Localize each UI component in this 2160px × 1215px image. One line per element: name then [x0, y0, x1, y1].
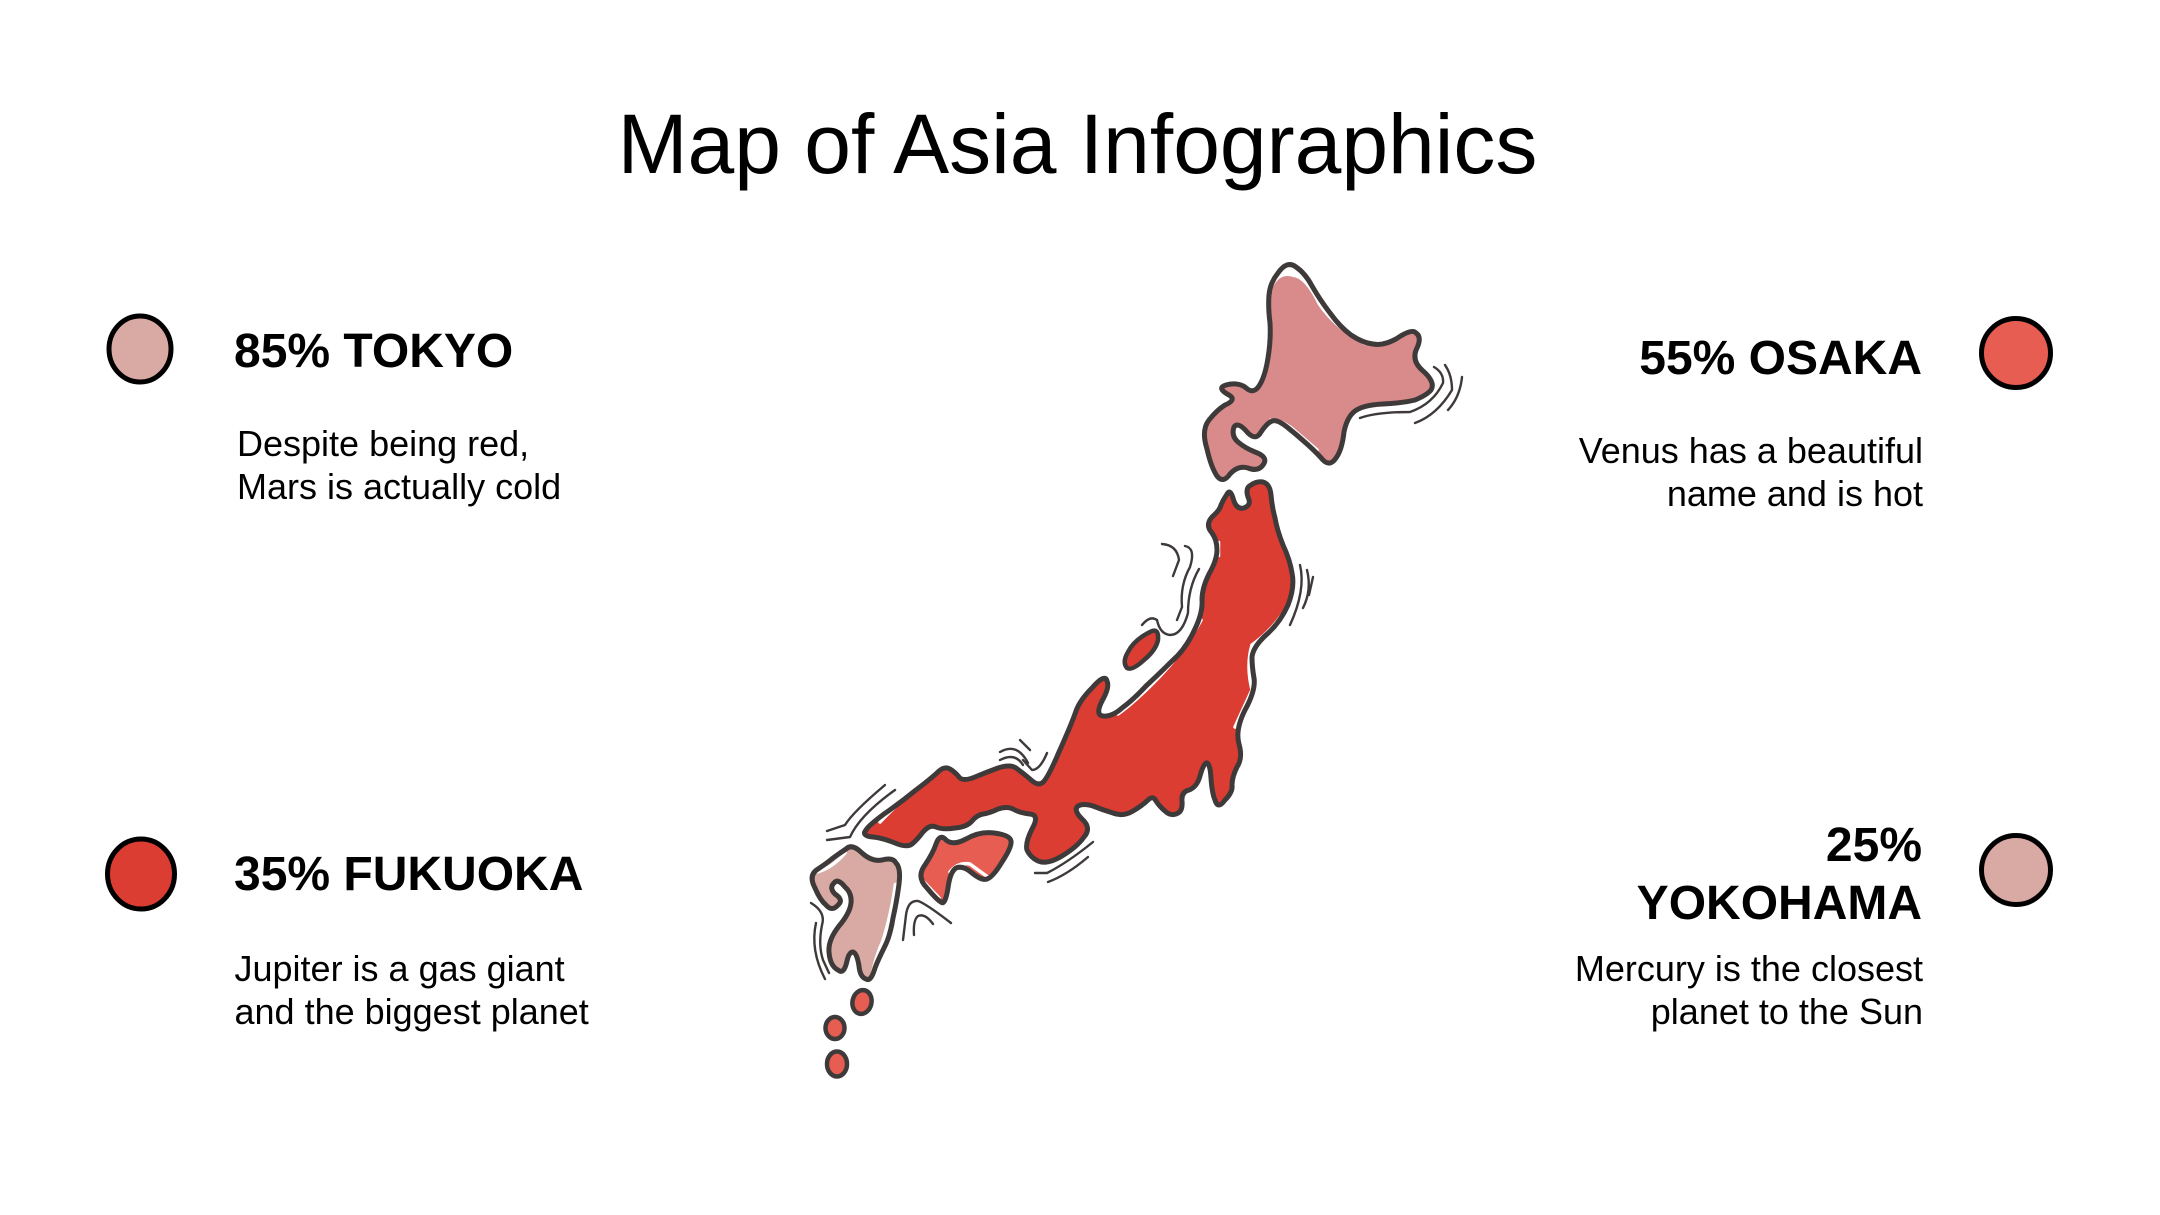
- panel: Tokyo: [109, 316, 561, 507]
- description: Tokyo: Despite being red,: [237, 423, 529, 464]
- heading: Yokohama: YOKOHAMA: [1637, 877, 1922, 930]
- description: Tokyo: Mars is actually cold: [237, 466, 561, 507]
- region: southern islands: [826, 988, 874, 1076]
- heading: Tokyo: 85% TOKYO: [234, 325, 513, 378]
- region: Hokkaido: [1204, 265, 1462, 480]
- heading: Osaka: 55% OSAKA: [1639, 332, 1922, 385]
- region: Shikoku: [921, 833, 1011, 903]
- region: Kyushu: [811, 847, 951, 980]
- description: Osaka: Venus has a beautiful: [1579, 430, 1923, 471]
- panel: Fukuoka: [108, 839, 589, 1032]
- region: Sado island: [1125, 631, 1158, 669]
- description: Yokohama: Mercury is the closest: [1575, 948, 1923, 989]
- description: Yokohama: planet to the Sun: [1651, 991, 1923, 1032]
- wave lines: Honshu: [827, 544, 1313, 882]
- title: Map of Asia Infographics: [618, 97, 1537, 191]
- marker: Tokyo: [109, 316, 171, 382]
- wave lines: Hokkaido: [1360, 365, 1462, 423]
- marker: Yokohama: [1982, 836, 2050, 904]
- region: Honshu: [827, 482, 1313, 882]
- heading: Fukuoka: 35% FUKUOKA: [234, 848, 583, 901]
- panel: Yokohama: [1575, 819, 2050, 1032]
- wave lines: Kyushu: [811, 901, 951, 979]
- description: Fukuoka: and the biggest planet: [234, 991, 589, 1032]
- marker: Fukuoka: [108, 839, 174, 909]
- heading: Yokohama: 25%: [1826, 819, 1922, 872]
- description: Fukuoka: Jupiter is a gas giant: [234, 948, 565, 989]
- panel: Osaka: [1579, 318, 2050, 514]
- marker: Osaka: [1982, 318, 2050, 388]
- description: Osaka: name and is hot: [1667, 473, 1923, 514]
- map of Japan: [811, 265, 1462, 1076]
